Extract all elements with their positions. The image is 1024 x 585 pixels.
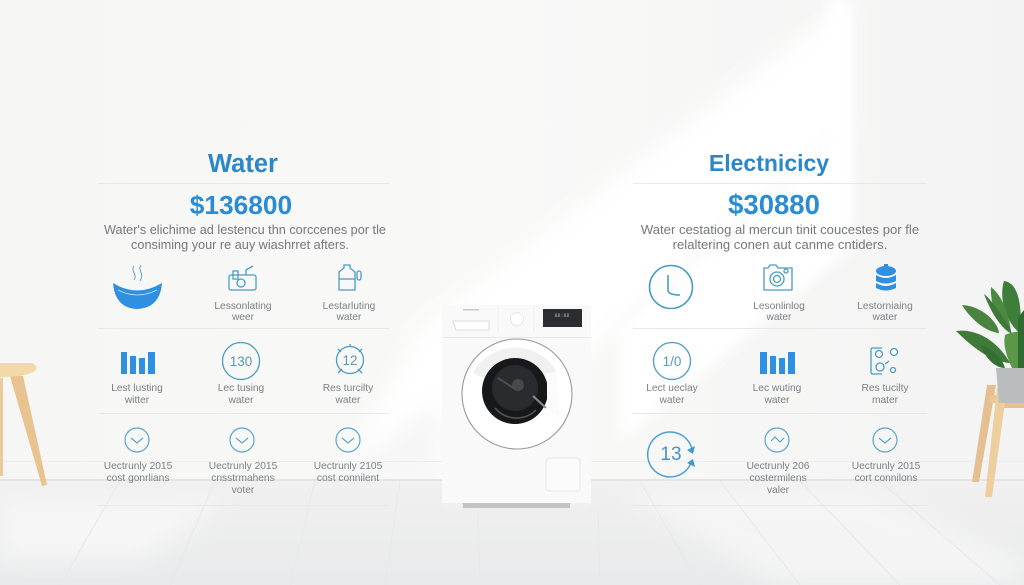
panel: water: [98, 150, 389, 506]
icon: phone and gears: [871, 348, 898, 374]
label: Res tucilty: [862, 383, 909, 394]
stool legs: [10, 376, 47, 486]
control dial: [510, 312, 524, 326]
plant pot: [996, 368, 1024, 403]
label: water: [336, 312, 362, 323]
icon: database stack: [876, 264, 896, 290]
label: voter: [232, 485, 255, 496]
icon: 12 timer: [336, 344, 364, 374]
machine feet: [443, 503, 589, 510]
label: Res turcilty: [323, 383, 374, 394]
price: water: $136800: [190, 190, 292, 220]
icon: check circle: [873, 428, 897, 452]
label: Lessonlating: [214, 301, 272, 312]
label: water: [764, 395, 790, 406]
icon: check circle: [336, 428, 360, 452]
label: valer: [767, 485, 790, 496]
icon: bottle: [339, 265, 361, 290]
label: Uectrunly 206: [747, 461, 810, 472]
potted plant on wooden stand: [956, 281, 1024, 497]
label: Lestarluting: [323, 301, 376, 312]
icon: 13 cycle: 13: [660, 444, 682, 465]
description: water: Water's elichime ad lestencu thn corccenes por tle: [104, 223, 386, 237]
icon: camera: [764, 265, 792, 290]
label: Lec wuting: [753, 383, 802, 394]
label: Lesonlinlog: [753, 301, 805, 312]
plant stand: [972, 385, 1024, 497]
label: water: [872, 312, 898, 323]
stool on left: [0, 363, 47, 486]
description: water: [104, 223, 386, 252]
door lip: [547, 372, 560, 418]
icon: 1/0 dial: 1/0: [663, 354, 681, 369]
label: Lest lusting: [111, 383, 163, 394]
description: electricity: relaltering conen aut canme cntiders.: [673, 237, 887, 252]
icon: wave circle: [765, 428, 789, 452]
stool seat: [0, 363, 36, 377]
panel: electricity: [633, 150, 927, 506]
label: cost connilent: [317, 473, 379, 484]
icon: 12 timer: 12: [342, 353, 358, 368]
label: cort connilons: [855, 473, 917, 484]
label: Uectrunly 2015: [104, 461, 173, 472]
label: Lec tusing: [218, 383, 265, 394]
label: water: [766, 312, 792, 323]
label: cost gonrlians: [107, 473, 169, 484]
label: water: [228, 395, 254, 406]
icon: sink and tap: [229, 266, 256, 290]
filter hatch: [546, 458, 580, 491]
icon: 130 dial: 130: [230, 354, 252, 369]
machine body: [442, 305, 591, 504]
label: water: [659, 395, 685, 406]
label: mater: [872, 395, 899, 406]
description: electricity: Water cestatiog al mercun tinit coucestes por fle: [641, 222, 919, 237]
label: witter: [124, 395, 150, 406]
description: electricity: [641, 222, 919, 252]
display panel: [543, 309, 582, 327]
heading: electricity: Electnicicy: [709, 150, 829, 176]
label: costermilens: [749, 473, 807, 484]
label: cnsstrmahens: [211, 473, 275, 484]
label: Uectrunly 2015: [209, 461, 278, 472]
icon: check circle: [125, 428, 149, 452]
drum: [482, 358, 548, 424]
label: Lect ueclay: [646, 383, 699, 394]
price: electricity: $30880: [728, 189, 820, 220]
label: weer: [231, 312, 255, 323]
label: Uectrunly 2015: [852, 461, 921, 472]
icon: bar chart: [121, 352, 155, 374]
display panel: 88:88: [554, 313, 570, 319]
icon: bar chart: [760, 352, 795, 374]
label: Uectrunly 2105: [314, 461, 383, 472]
heading: water: Water: [208, 150, 278, 178]
icon: 1/0 dial: [654, 342, 690, 380]
icon: check circle: [230, 428, 254, 452]
door: [462, 339, 572, 449]
icon: 13 cycle: [648, 432, 695, 477]
icon: clock: [650, 266, 692, 308]
floor: [0, 481, 1024, 585]
label: Lestorniaing: [857, 301, 913, 312]
detergent drawer: [453, 308, 534, 332]
icon: 130 dial: [222, 342, 260, 380]
plant leaves: [956, 281, 1024, 368]
icon: steaming bowl: [113, 265, 162, 309]
description: water: consiming your re auy wiashrret afters.: [131, 238, 349, 252]
label: water: [335, 395, 361, 406]
washing machine: [442, 305, 591, 510]
